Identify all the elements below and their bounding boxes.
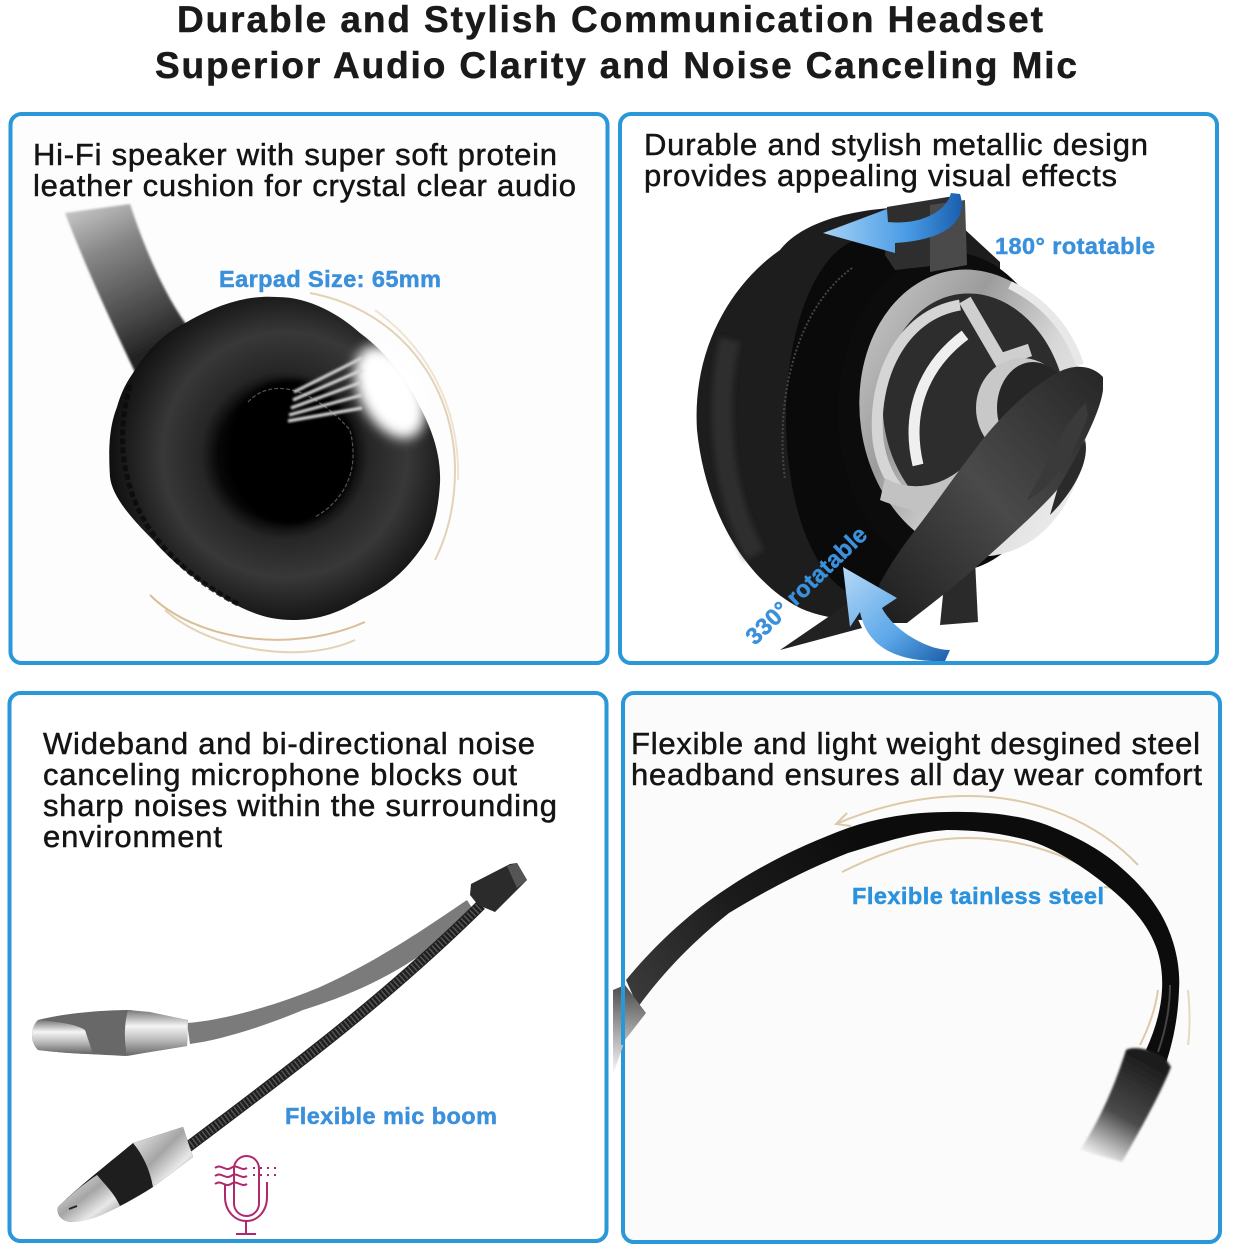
gold flex arrows bbox=[836, 796, 1190, 1045]
label: 330 rotatable: 330° rotatable bbox=[740, 521, 872, 650]
panel heading: design: Durable and stylish metallic design bbox=[644, 127, 1148, 162]
grey boom side bbox=[187, 900, 472, 1044]
panel: steel headband bbox=[613, 693, 1220, 1242]
panel heading: speaker: leather cushion for crystal clear audio bbox=[33, 168, 576, 203]
panel: metallic design bbox=[620, 114, 1217, 663]
panel heading: headband bbox=[631, 726, 1202, 792]
title: Durable and Stylish Communication Headset bbox=[177, 0, 1043, 40]
panel: earpad cushion bbox=[10, 114, 608, 663]
panel heading: design bbox=[644, 127, 1148, 193]
upper connector bbox=[32, 1010, 188, 1056]
panel heading: headband: Flexible and light weight desgined steel bbox=[631, 726, 1200, 761]
boom tip bbox=[470, 863, 527, 912]
earpad bbox=[109, 297, 440, 620]
black boom side bbox=[188, 905, 481, 1147]
panel: microphone bbox=[10, 693, 606, 1241]
panel heading: headband: headband ensures all day wear comfort bbox=[631, 757, 1202, 792]
arrow: 180 degree rotation bbox=[823, 193, 962, 253]
label: flexible mic boom: Flexible mic boom bbox=[285, 1103, 497, 1129]
title: Superior Audio Clarity and Noise Canceling Mic bbox=[155, 45, 1077, 86]
lower connector bbox=[58, 1127, 193, 1222]
panel heading: speaker: Hi-Fi speaker with super soft protein bbox=[33, 137, 557, 172]
label: flexible steel: Flexible tainless steel bbox=[852, 883, 1104, 909]
title bbox=[155, 0, 1077, 86]
label: 180 rotatable: 180° rotatable bbox=[995, 233, 1155, 259]
icon: microphone bbox=[215, 1156, 280, 1234]
steel headband bbox=[626, 812, 1179, 1063]
coiled cord bbox=[940, 560, 978, 625]
panel heading: noise canceling: sharp noises within the surrounding bbox=[43, 788, 557, 823]
yoke block bbox=[885, 195, 967, 270]
headband stub bbox=[65, 204, 186, 372]
panel heading: noise canceling: canceling microphone blocks out bbox=[43, 757, 517, 792]
headset ear cup bbox=[697, 195, 1105, 620]
panel heading: noise canceling bbox=[43, 726, 557, 854]
panel heading: speaker bbox=[33, 137, 576, 203]
microphone arm bbox=[780, 367, 1103, 650]
arrow: 330 degree rotation bbox=[843, 567, 950, 661]
headband end block left bbox=[613, 985, 646, 1075]
headband end block right bbox=[1080, 1048, 1171, 1162]
panel heading: noise canceling: Wideband and bi-directional noise bbox=[43, 726, 535, 761]
white sound burst bbox=[288, 334, 440, 450]
gold sound arcs bbox=[150, 293, 458, 652]
panel heading: design: provides appealing visual effects bbox=[644, 158, 1117, 193]
panel heading: noise canceling: environment bbox=[43, 819, 222, 854]
label: earpad size: Earpad Size: 65mm bbox=[219, 266, 441, 292]
mic boom illustration bbox=[32, 863, 527, 1222]
